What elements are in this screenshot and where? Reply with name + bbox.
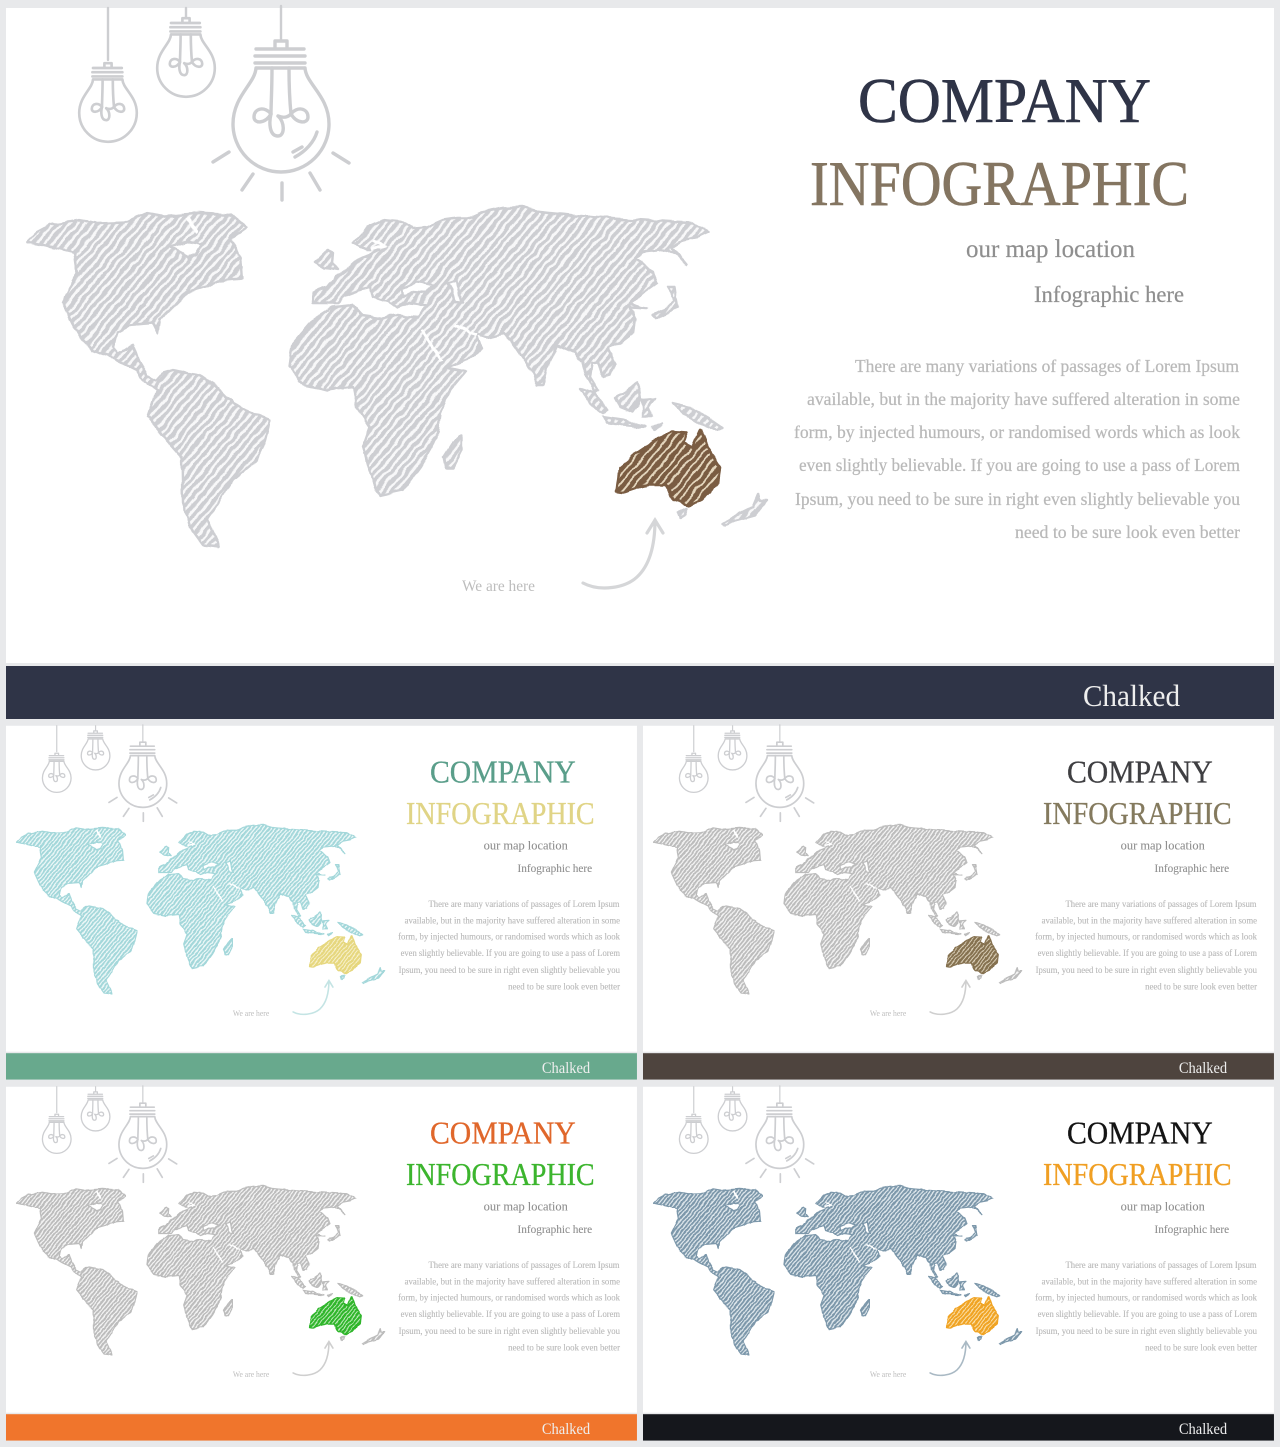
- world map: [27, 207, 767, 547]
- title line one: COMPANY: [1067, 1116, 1213, 1151]
- body text: need to be sure look even better: [508, 1343, 620, 1353]
- body text: even slightly believable. If you are going to use a pass of Lorem: [1038, 948, 1257, 958]
- body text: form, by injected humours, or randomised words which as look: [398, 1293, 621, 1303]
- body text: need to be sure look even better: [1145, 1343, 1257, 1353]
- body text: [1035, 899, 1258, 992]
- arrow: [293, 981, 333, 1014]
- body text: even slightly believable. If you are going to use a pass of Lorem: [401, 948, 620, 958]
- title line one: COMPANY: [858, 66, 1151, 136]
- footer label: Chalked: [1179, 1421, 1227, 1438]
- title line one: COMPANY: [430, 1116, 576, 1151]
- body text: available, but in the majority have suffered alteration in some: [1042, 1276, 1257, 1286]
- footer bar: [6, 1053, 637, 1080]
- highlighted Australia: [310, 936, 361, 973]
- icon: three hanging light bulbs: [42, 1086, 177, 1182]
- body text: even slightly believable. If you are going to use a pass of Lorem: [1038, 1309, 1257, 1319]
- body text: [398, 1260, 621, 1353]
- arrow: [583, 520, 663, 588]
- icon: three hanging light bulbs: [79, 6, 349, 200]
- panel: orange and green variant: [6, 1086, 637, 1441]
- world map: [653, 1186, 1022, 1355]
- arrow: [930, 981, 970, 1014]
- body text: form, by injected humours, or randomised words which as look: [398, 932, 621, 942]
- icon: three hanging light bulbs: [42, 725, 177, 821]
- title line one: COMPANY: [430, 755, 576, 790]
- body text: available, but in the majority have suffered alteration in some: [807, 389, 1240, 409]
- body text: need to be sure look even better: [1015, 522, 1240, 542]
- footer label: Chalked: [1083, 678, 1180, 713]
- body text: There are many variations of passages of Lorem Ipsum: [1065, 899, 1257, 909]
- subtitle: our map location: [484, 839, 569, 853]
- title line two: INFOGRAPHIC: [406, 796, 595, 831]
- body text: available, but in the majority have suffered alteration in some: [405, 915, 620, 925]
- world map: [16, 825, 385, 994]
- body text: There are many variations of passages of Lorem Ipsum: [1065, 1260, 1257, 1270]
- body text: form, by injected humours, or randomised words which as look: [1035, 932, 1258, 942]
- body text: form, by injected humours, or randomised words which as look: [794, 422, 1240, 442]
- body text: form, by injected humours, or randomised words which as look: [1035, 1293, 1258, 1303]
- body text: Ipsum, you need to be sure in right even slightly believable you: [1036, 965, 1258, 975]
- label: we are here: We are here: [870, 1370, 907, 1379]
- footer bar: [6, 1414, 637, 1441]
- body text: [794, 356, 1240, 542]
- footer bar: [643, 1053, 1274, 1080]
- slide card: [643, 1087, 1274, 1413]
- footer bar: [643, 1414, 1274, 1441]
- panel: slate and amber variant: [643, 1086, 1274, 1441]
- slide card: [6, 726, 637, 1052]
- arrow: [930, 1342, 970, 1375]
- body text: There are many variations of passages of Lorem Ipsum: [428, 899, 620, 909]
- slide card: [6, 8, 1274, 663]
- body text: even slightly believable. If you are going to use a pass of Lorem: [401, 1309, 620, 1319]
- body text: available, but in the majority have suffered alteration in some: [1042, 915, 1257, 925]
- label: we are here: We are here: [462, 578, 535, 595]
- footer label: Chalked: [542, 1421, 590, 1438]
- subtitle two: Infographic here: [518, 863, 592, 875]
- world map: [653, 825, 1022, 994]
- arrow: [293, 1342, 333, 1375]
- panel: main slide brown: [6, 6, 1274, 719]
- subtitle two: Infographic here: [1034, 282, 1184, 307]
- body text: There are many variations of passages of Lorem Ipsum: [428, 1260, 620, 1270]
- footer label: Chalked: [1179, 1060, 1227, 1077]
- title line two: INFOGRAPHIC: [1043, 796, 1232, 831]
- slide card: [6, 1087, 637, 1413]
- body text: Ipsum, you need to be sure in right even slightly believable you: [399, 1326, 621, 1336]
- body text: Ipsum, you need to be sure in right even slightly believable you: [795, 489, 1240, 509]
- world map: [16, 1186, 385, 1355]
- highlighted Australia: [947, 936, 998, 973]
- subtitle two: Infographic here: [518, 1224, 592, 1236]
- label: we are here: We are here: [233, 1009, 270, 1018]
- subtitle two: Infographic here: [1155, 863, 1229, 875]
- panel: teal variant: [6, 725, 637, 1080]
- subtitle two: Infographic here: [1155, 1224, 1229, 1236]
- subtitle: our map location: [1121, 1200, 1206, 1214]
- footer bar: [6, 666, 1274, 719]
- body text: Ipsum, you need to be sure in right even slightly believable you: [1036, 1326, 1258, 1336]
- panel: grey and tan variant: [643, 725, 1274, 1080]
- footer label: Chalked: [542, 1060, 590, 1077]
- title line one: COMPANY: [1067, 755, 1213, 790]
- body text: There are many variations of passages of Lorem Ipsum: [855, 356, 1239, 376]
- subtitle: our map location: [1121, 839, 1206, 853]
- title line two: INFOGRAPHIC: [1043, 1157, 1232, 1192]
- body text: need to be sure look even better: [508, 982, 620, 992]
- highlighted Australia: [617, 430, 720, 505]
- title line two: INFOGRAPHIC: [810, 149, 1189, 219]
- icon: three hanging light bulbs: [679, 1086, 814, 1182]
- label: we are here: We are here: [870, 1009, 907, 1018]
- subtitle: our map location: [484, 1200, 569, 1214]
- slide card: [643, 726, 1274, 1052]
- body text: Ipsum, you need to be sure in right even slightly believable you: [399, 965, 621, 975]
- icon: three hanging light bulbs: [679, 725, 814, 821]
- body text: [1035, 1260, 1258, 1353]
- subtitle: our map location: [966, 236, 1135, 263]
- highlighted Australia: [947, 1297, 998, 1334]
- body text: need to be sure look even better: [1145, 982, 1257, 992]
- body text: available, but in the majority have suffered alteration in some: [405, 1276, 620, 1286]
- title line two: INFOGRAPHIC: [406, 1157, 595, 1192]
- body text: [398, 899, 621, 992]
- label: we are here: We are here: [233, 1370, 270, 1379]
- highlighted Australia: [310, 1297, 361, 1334]
- body text: even slightly believable. If you are going to use a pass of Lorem: [799, 455, 1240, 475]
